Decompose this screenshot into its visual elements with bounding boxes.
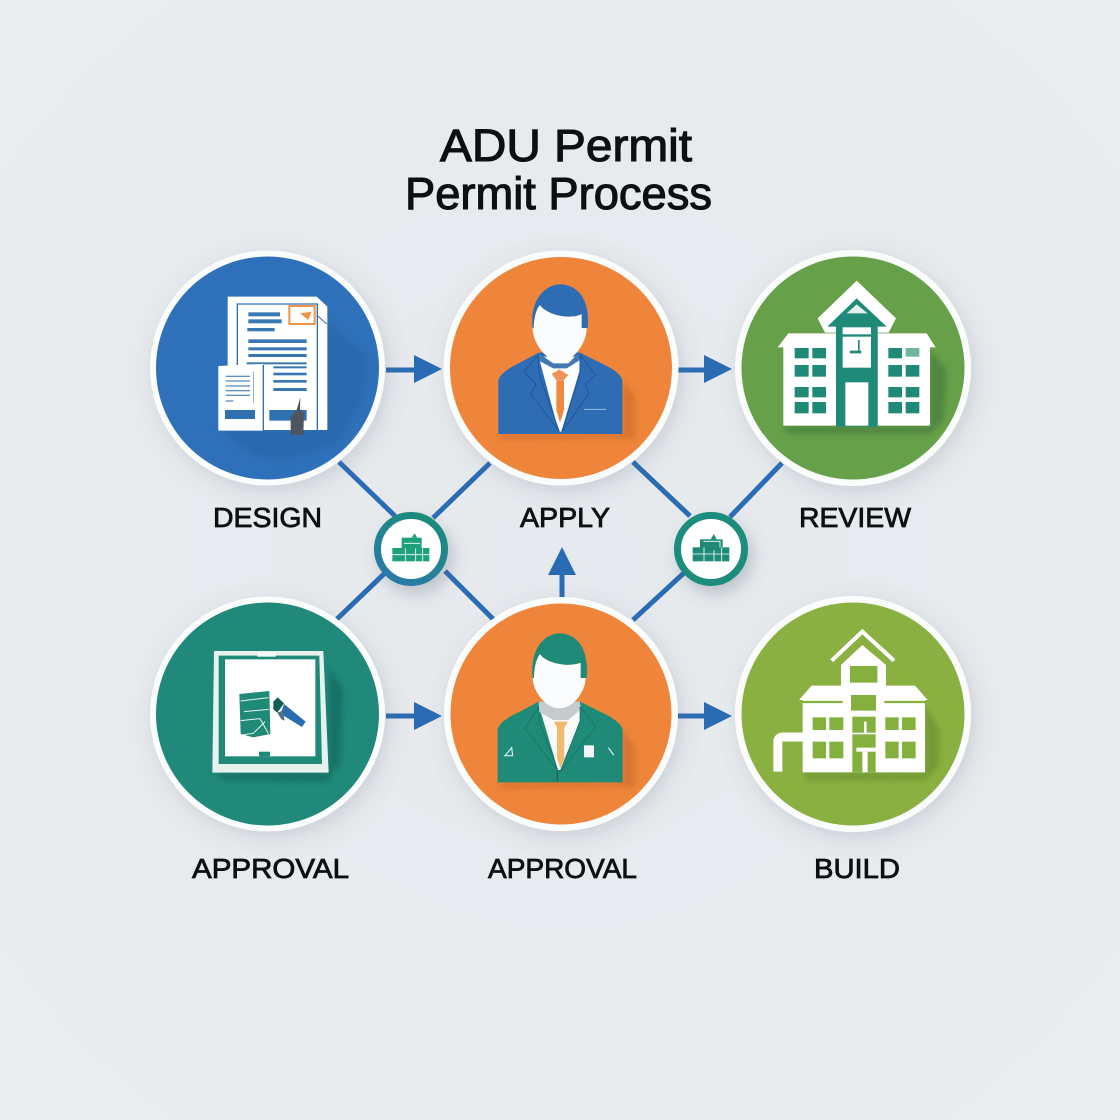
connector lines bbox=[337, 462, 782, 620]
arrow: approval to approval bbox=[386, 702, 442, 730]
label: approval middle: APPROVAL bbox=[488, 853, 637, 884]
icon: civic building bbox=[778, 281, 947, 433]
node: right connector badge bbox=[678, 516, 744, 582]
title: ADU Permit bbox=[440, 120, 693, 171]
label: design: DESIGN bbox=[213, 502, 322, 533]
title: Permit Process bbox=[405, 168, 712, 219]
icon: person in green suit bbox=[498, 633, 635, 788]
icon: signed approval document bbox=[212, 651, 343, 782]
icon: person in blue suit bbox=[498, 284, 635, 440]
icon: small building right bbox=[693, 534, 729, 561]
title bbox=[405, 120, 712, 219]
panel: apply bbox=[444, 250, 678, 486]
panel: review bbox=[735, 250, 971, 486]
arrow: approval to build bbox=[678, 702, 732, 730]
panel: build bbox=[735, 596, 971, 832]
icon: small building left bbox=[392, 533, 429, 561]
icon: house under construction bbox=[778, 632, 940, 781]
panel: design bbox=[150, 250, 385, 486]
label: approval left: APPROVAL bbox=[192, 853, 349, 884]
panel: approval officer bbox=[444, 597, 678, 831]
label: build: BUILD bbox=[814, 853, 900, 884]
label: apply: APPLY bbox=[520, 502, 610, 533]
icon: permit documents bbox=[218, 297, 367, 460]
arrow: approval up to apply bbox=[548, 547, 576, 598]
arrow: design to apply bbox=[386, 355, 442, 383]
label: review: REVIEW bbox=[799, 502, 912, 533]
arrow: apply to review bbox=[678, 355, 732, 383]
node: left connector badge bbox=[378, 516, 444, 582]
panel: approval document bbox=[150, 596, 385, 832]
